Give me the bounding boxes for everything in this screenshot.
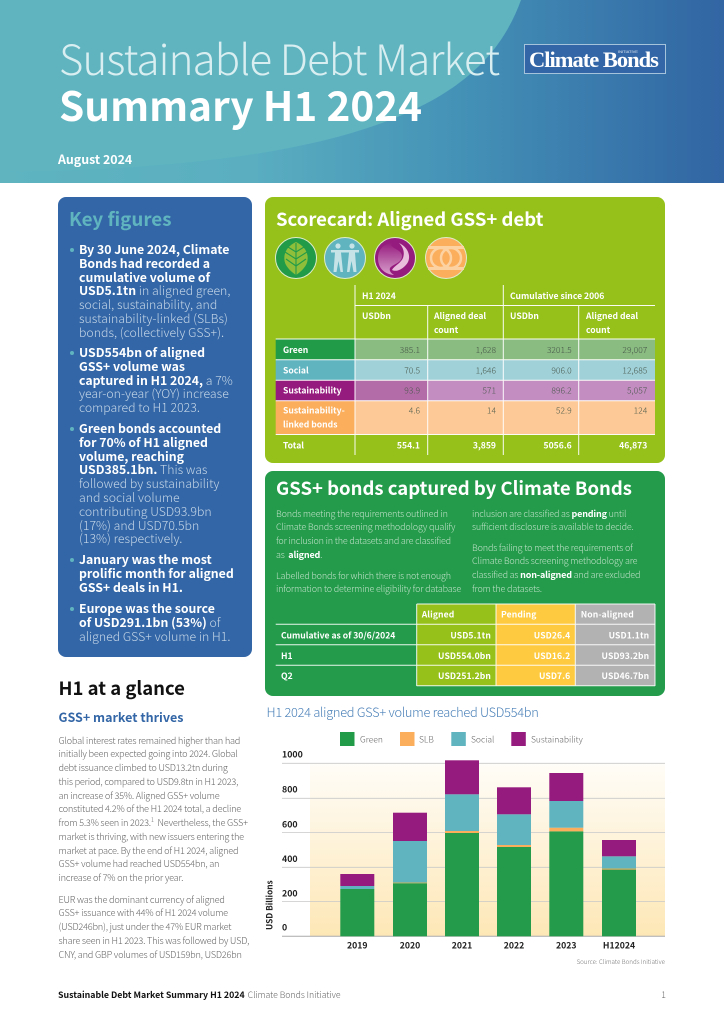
text: labelled bonds: Labelled bonds for which there is not enough (276, 568, 451, 582)
table header labels: count (434, 324, 459, 336)
row labels: linked bonds (283, 418, 337, 430)
table values: 906.0 (551, 364, 572, 376)
panel: GSS+ bonds captured (265, 471, 665, 696)
bullet 3: volume, reaching (79, 447, 184, 465)
table values: 1,646 (476, 364, 496, 376)
table header labels: USDbn (510, 310, 539, 322)
legend: SLB (419, 734, 434, 746)
x axis labels: 2021 (452, 938, 472, 952)
bullet 2: USD554bn of aligned (79, 343, 205, 361)
body paragraph 2 (58, 892, 249, 960)
values: USD554.0bn (438, 650, 491, 662)
bullet 3: and social volume (79, 488, 180, 506)
bullet 2 (70, 343, 233, 416)
panel: key figures (58, 197, 252, 657)
y axis labels: 600 (282, 818, 298, 830)
column headers: Non-aligned (581, 608, 634, 620)
row headers: Q2 (281, 670, 293, 682)
text: aligned definition: as aligned. (276, 548, 322, 561)
table header labels: H1 2024 (362, 290, 396, 302)
values: USD16.2 (534, 650, 570, 662)
table totals: 554.1 (397, 440, 420, 452)
text: non-aligned definition: Bonds failing to meet the requirements of (472, 540, 633, 554)
bullet 4: prolific month for aligned (79, 564, 234, 582)
y axis labels: 400 (282, 852, 298, 865)
table values: 93.9 (404, 384, 420, 396)
values: USD5.1tn (450, 630, 491, 642)
text: non-aligned definition: Climate Bonds screening methodology are (472, 554, 637, 567)
bullet 3: (17%) and USD70.5bn (79, 516, 199, 534)
text: aligned definition (276, 506, 456, 561)
title line 2: Summary H1 2024 (59, 74, 422, 133)
table values: 52.9 (556, 404, 572, 416)
table header labels (362, 290, 638, 336)
body paragraph 1: debt issuance climbed to USD13.2tn during (58, 760, 228, 774)
text: pending definition: sufficient disclosure is available to decide. (472, 520, 634, 533)
row labels: Sustainability (283, 384, 342, 396)
bar 2022 (497, 787, 531, 936)
x axis labels: 2019 (347, 938, 368, 952)
column headers (421, 608, 634, 620)
row colour: sustainability (276, 380, 655, 400)
body paragraph 1: market is thriving, with new issuers entering the (58, 829, 244, 843)
body paragraph 2: EUR was the dominant currency of aligned (58, 892, 225, 906)
table values: 1,628 (476, 344, 496, 356)
table values: 70.5 (404, 364, 420, 376)
scorecard table (276, 285, 655, 455)
bullet 3 (70, 419, 221, 547)
table header labels: Cumulative since 2006 (510, 290, 604, 302)
icon: social figures (324, 238, 366, 278)
bullet 1: cumulative volume of (79, 268, 210, 286)
table values: 5,057 (627, 384, 648, 396)
body paragraph 2: share seen in H1 2023. This was followed by USD, (58, 933, 249, 947)
values: USD1.1tn (609, 630, 649, 642)
icon: linked rings (426, 238, 466, 278)
bullet 3: for 70% of H1 aligned (79, 433, 208, 451)
column: non-aligned (575, 604, 655, 686)
text: aligned definition: Bonds meeting the requirements outlined in (276, 506, 448, 520)
body paragraph 1 (58, 732, 248, 884)
legend: Green (360, 734, 383, 746)
bar 2021 (445, 760, 479, 936)
row headers: Cumulative as of 30/6/2024 (281, 630, 395, 642)
table totals (397, 440, 647, 452)
logo tagline: INITIATIVE (618, 48, 638, 54)
table values (400, 344, 648, 416)
banner curve (268, 0, 521, 152)
table values: 385.1 (400, 344, 420, 356)
bullet 5: of USD291.1bn (53%) of (79, 613, 220, 631)
values: USD26.4 (534, 630, 570, 642)
bullet 3: (13%) respectively. (79, 529, 182, 547)
body paragraph 1: increase of 7% on the prior year. (58, 870, 183, 884)
bullet 3: contributing USD93.9bn (79, 502, 212, 520)
text: pending definition: inclusion are classified as pending until (472, 506, 626, 520)
bullet 3: Green bonds accounted (79, 419, 221, 437)
legend (340, 732, 584, 746)
table totals: 5056.6 (544, 440, 572, 452)
x axis labels (347, 938, 635, 952)
chart title: H1 2024 aligned GSS+ volume reached USD554bn (266, 702, 539, 721)
y axis labels: 800 (282, 782, 298, 796)
bullet 1: Bonds had recorded a (79, 254, 210, 272)
bullet 3: followed by sustainability (79, 474, 219, 492)
body paragraph 1: an increase of 35%. Aligned GSS+ volume (58, 788, 219, 802)
heading: key figures: Key figures (69, 205, 172, 232)
row labels: Total (283, 440, 304, 452)
y axis labels: 200 (282, 886, 298, 900)
bullet 3: USD385.1bn. This was (79, 460, 207, 478)
x axis labels: 2023 (556, 938, 577, 952)
bar H1 2024 (602, 840, 636, 936)
text: labelled bonds (276, 568, 461, 595)
text: pending definition (472, 506, 634, 533)
body paragraph 1: market at pace. By the end of H1 2024, aligned (58, 842, 238, 856)
table values: 896.2 (551, 384, 572, 396)
bullet 5: Europe was the source (79, 599, 215, 617)
legend: Sustainability (531, 734, 584, 746)
text: non-aligned definition (472, 540, 640, 595)
body paragraph 2: GSS+ issuance with 44% of H1 2024 volume (58, 905, 228, 919)
table values: 3201.5 (547, 344, 572, 356)
table header labels: USDbn (362, 310, 391, 322)
column headers: Aligned (421, 608, 454, 620)
text: non-aligned definition: classified as non-aligned and are excluded (472, 568, 640, 581)
scorecard icons and table (275, 237, 655, 455)
title line 1: Sustainable Debt Market (59, 27, 499, 88)
bullet 1: bonds, (collectively GSS+). (79, 323, 224, 341)
values: USD93.2bn (602, 650, 649, 662)
table values: 4.6 (409, 404, 420, 416)
bullet 1: social, sustainability, and (79, 295, 217, 313)
text: labelled bonds: information to determine eligibility for database (276, 582, 461, 595)
values (438, 630, 649, 682)
bullet 2: GSS+ volume was (79, 357, 185, 375)
classification table (276, 604, 656, 686)
logo wordmark: Climate Bonds (529, 46, 658, 72)
bullet 5 (70, 599, 230, 645)
values: USD251.2bn (438, 670, 491, 682)
chart source: Source: Climate Bonds Initiative (577, 957, 666, 966)
bullet 1: USD5.1tn in aligned green, (79, 281, 230, 299)
body paragraph 1: from 5.3% seen in 2023.1 Nevertheless, the GSS+ (58, 815, 248, 829)
y axis labels: 1000 (282, 748, 303, 760)
row headers: H1 (281, 650, 293, 662)
heading: H1 at a glance: H1 at a glance (58, 675, 185, 701)
body paragraph 1: Global interest rates remained higher than had (58, 732, 240, 746)
logo (524, 44, 666, 74)
text: aligned definition: Climate Bonds screening methodology qualify (276, 520, 455, 533)
x axis labels: 2022 (504, 938, 524, 952)
legend: Social (471, 734, 494, 746)
bullet 4: January was the most (79, 550, 212, 568)
bullet 1 (70, 240, 230, 341)
table values: 124 (634, 404, 648, 416)
table values: 14 (487, 404, 496, 416)
body paragraph 1: this period, compared to USD9.8tn in H1 2023, (58, 774, 238, 788)
panel: scorecard (265, 197, 665, 463)
page number: 1 (661, 988, 666, 1001)
y axis labels: 0 (282, 920, 287, 934)
table header labels: Aligned deal (585, 310, 638, 322)
table values: 12,685 (622, 364, 648, 376)
text: non-aligned definition: from the datasets. (472, 582, 542, 595)
table totals: 3,859 (473, 440, 496, 452)
bar 2023 (549, 773, 583, 936)
body paragraph 1: GSS+ volume had reached USD554bn, an (58, 856, 219, 870)
table header labels: Aligned deal (433, 310, 486, 322)
values: USD46.7bn (602, 670, 649, 682)
bullet 2: compared to H1 2023. (79, 398, 200, 416)
column headers: Pending (501, 608, 537, 620)
table totals: 46,873 (619, 440, 647, 452)
bullet 1: By 30 June 2024, Climate (79, 240, 229, 258)
column: aligned (417, 604, 496, 686)
table values: 571 (482, 384, 496, 396)
row colour: sustainability-linked (276, 401, 655, 434)
heading: scorecard: Scorecard: Aligned GSS+ debt (276, 206, 543, 232)
body paragraph 2: CNY, and GBP volumes of USD159bn, USD26bn (58, 946, 242, 960)
icon: sustainability swirl (374, 238, 416, 278)
column: pending (496, 604, 575, 686)
plot background (310, 763, 665, 936)
text: aligned definition: for inclusion in the datasets and are classified (276, 534, 451, 547)
y axis labels (282, 748, 303, 934)
y axis title: USD Billions (264, 880, 276, 930)
bullet 2: year-on-year (YOY) increase (79, 384, 229, 402)
row labels: Green (283, 344, 308, 356)
footer title: Sustainable Debt Market Summary H1 2024 Climate Bonds Initiative (58, 988, 341, 1001)
row labels (283, 344, 345, 452)
table values: 29,007 (622, 344, 648, 356)
header banner (0, 0, 724, 183)
row labels: Sustainability- (283, 404, 345, 416)
body paragraph 2: (USD246bn), just under the 47% EUR market (58, 919, 231, 933)
bullet 1: sustainability-linked (SLBs) (79, 309, 228, 327)
row headers (281, 630, 395, 682)
bullet 2: captured in H1 2024, a 7% (79, 371, 233, 389)
row labels: Social (283, 364, 309, 376)
bullet 4: GSS+ deals in H1. (79, 578, 183, 596)
body paragraph 1: constituted 4.2% of the H1 2024 total, a decline (58, 801, 241, 815)
x axis labels: H12024 (603, 938, 635, 952)
bar 2020 (393, 813, 427, 936)
subheading: GSS+ market thrives: GSS+ market thrives (58, 707, 183, 726)
values: USD7.6 (539, 670, 570, 682)
footer (58, 988, 666, 1001)
x axis labels: 2020 (400, 938, 420, 952)
icon: green leaf (276, 238, 316, 278)
heading: GSS+ bonds captured: GSS+ bonds captured by Climate Bonds (276, 475, 632, 501)
bar 2019 (340, 874, 374, 936)
body paragraph 1: initially been expected going into 2024. Global (58, 746, 238, 760)
date: August 2024 (58, 150, 132, 168)
row colour: green (276, 340, 655, 360)
table header labels: count (586, 324, 611, 336)
row colour: social (276, 360, 655, 380)
bullet 4 (70, 550, 234, 596)
bullet 5: aligned GSS+ volume in H1. (79, 627, 230, 645)
